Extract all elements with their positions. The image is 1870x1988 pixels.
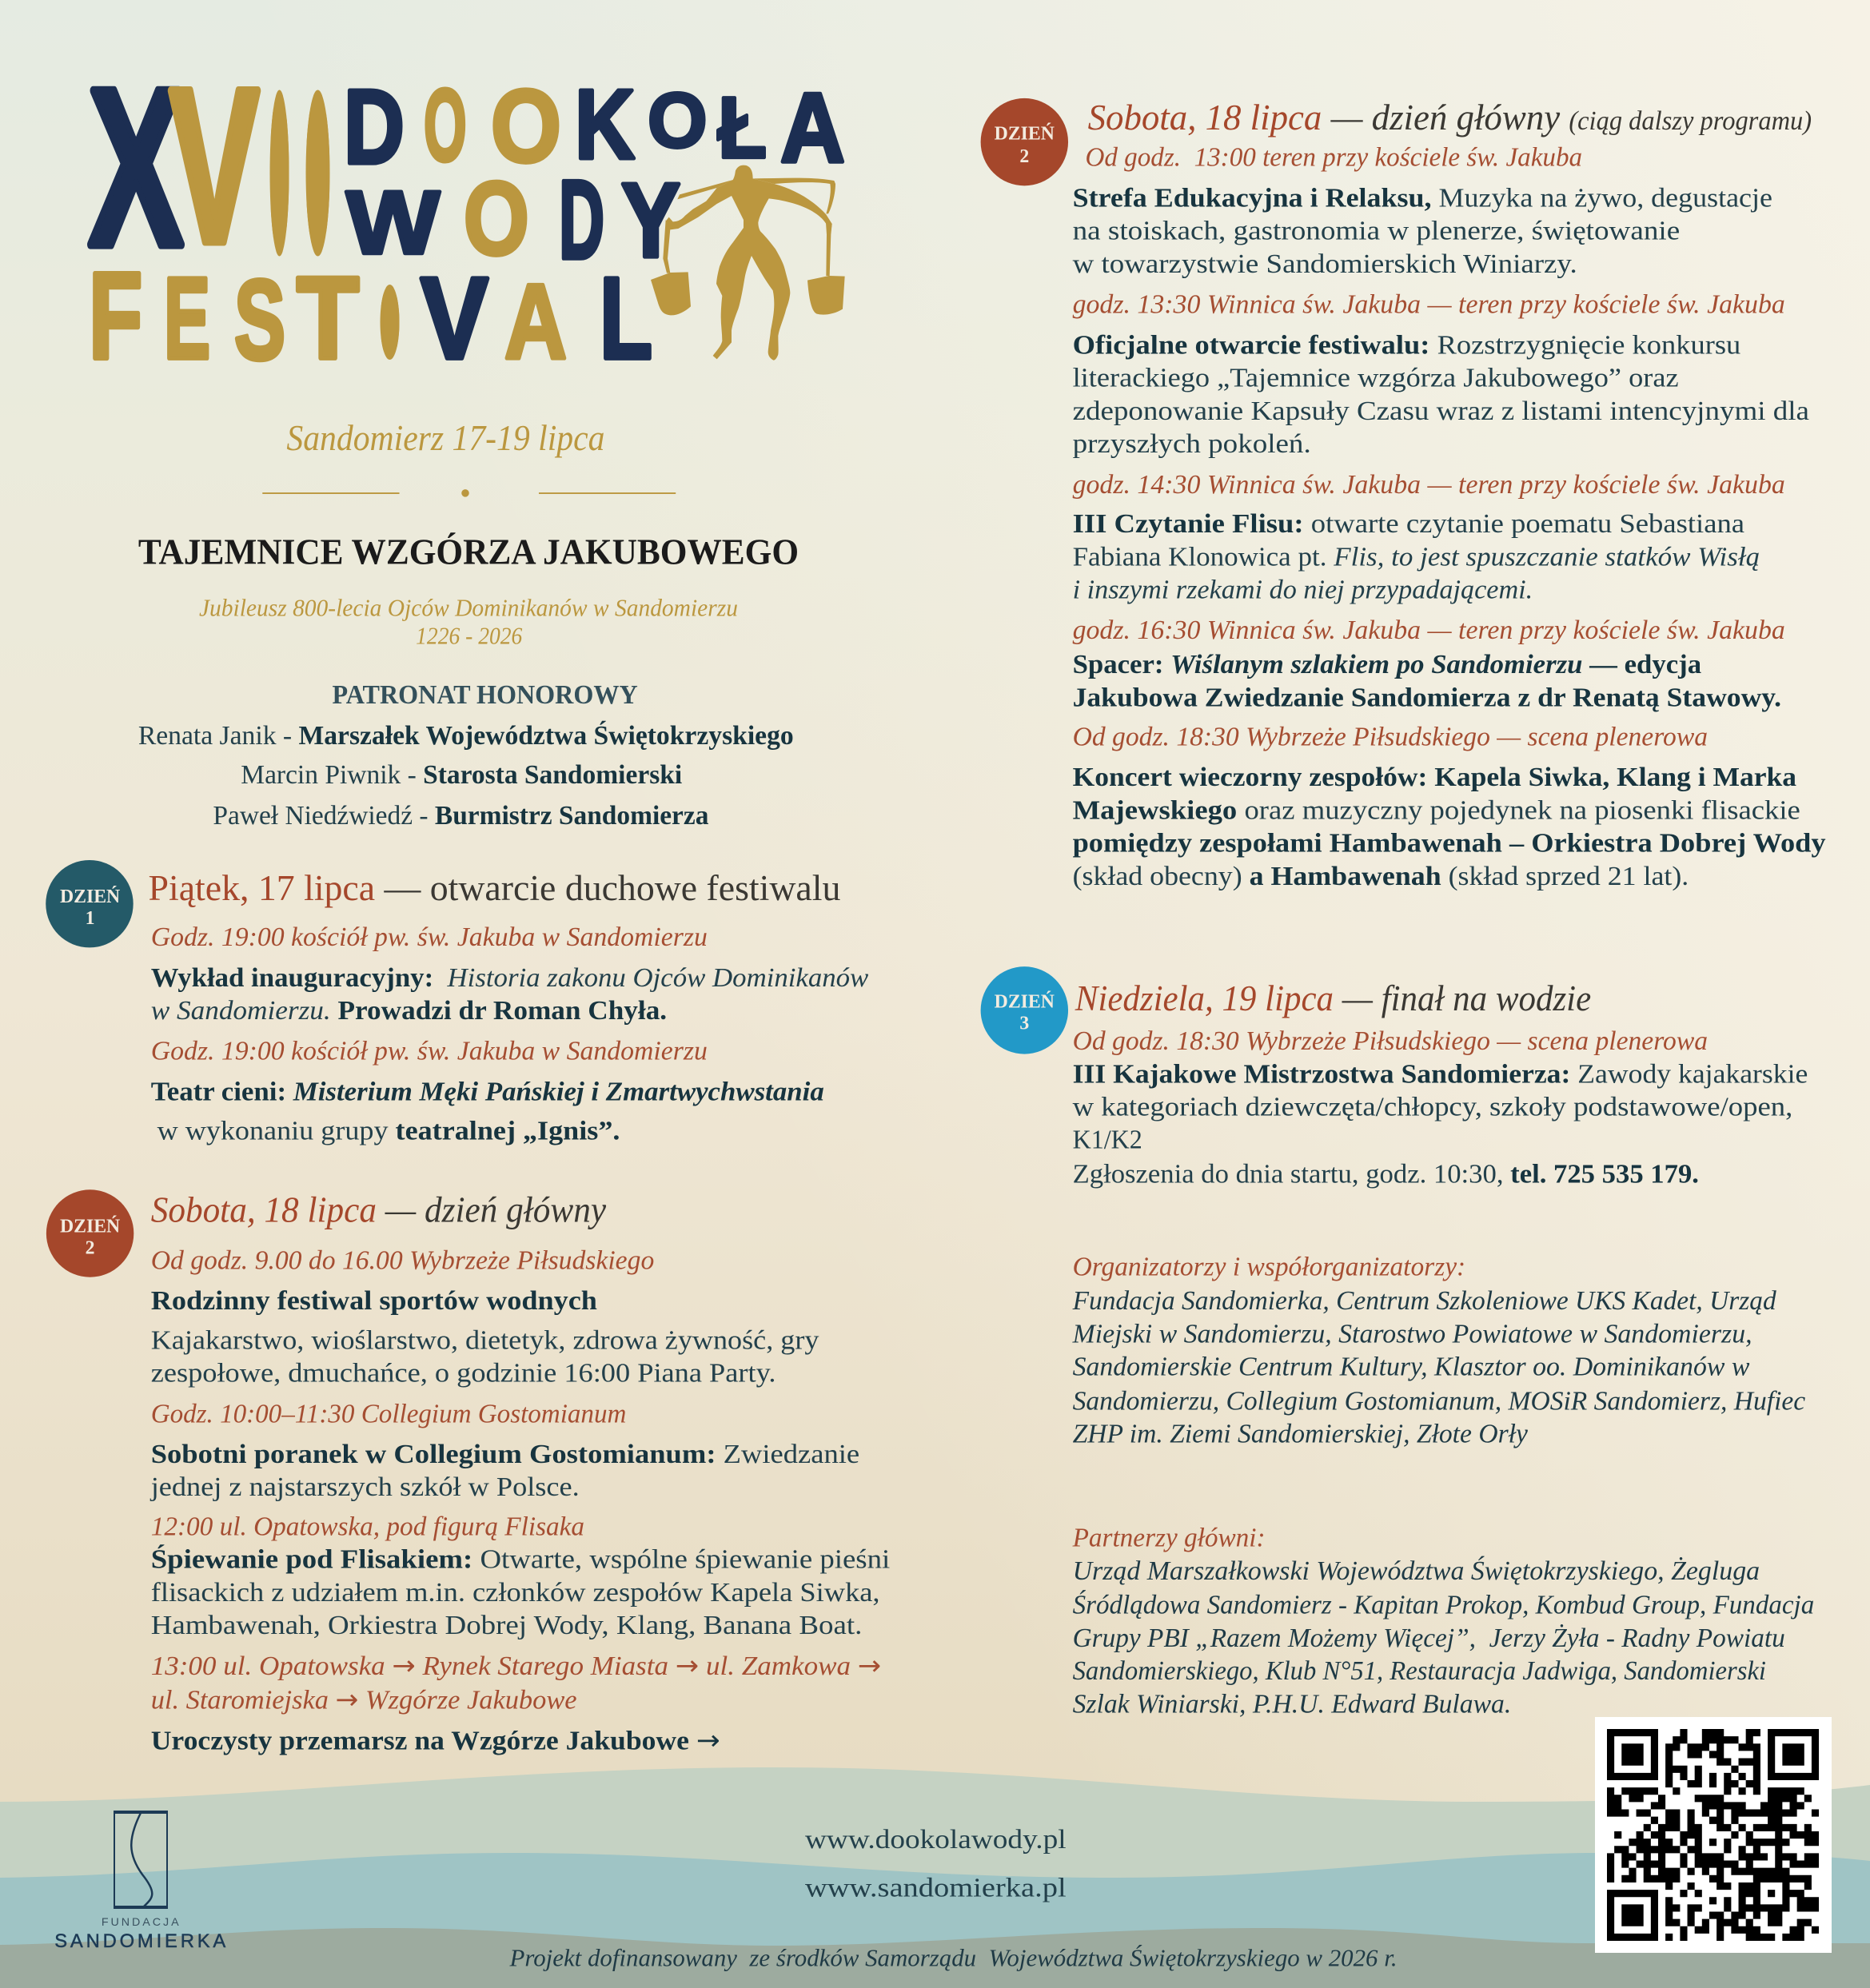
honorary patronage: Paweł Niedźwiedź - Burmistrz Sandomierza [213,801,708,831]
icon: water carrier figure [651,165,845,361]
day 2 afternoon events: pomiędzy zespołami Hambawenah – Orkiestra Dobrej Wody [1073,829,1826,859]
organizers list: Fundacja Sandomierka, Centrum Szkoleniowe UKS Kadet, Urząd [1072,1286,1776,1316]
funding note: Projekt dofinansowany ze środków Samorządu Województwa Świętokrzyskiego w 2026 r. [508,1944,1398,1972]
website links: www.sandomierka.pl [805,1873,1067,1902]
day 2 afternoon events: literackiego „Tajemnice wzgórza Jakubowego” oraz [1073,364,1679,393]
badge: day 3: 3 [1019,1014,1029,1034]
day 2 morning events: Kajakarstwo, wioślarstwo, dietetyk, zdrowa żywność, gry [151,1325,819,1355]
day 2 morning events: Śpiewanie pod Flisakiem: Otwarte, wspólne śpiewanie pieśni [151,1544,890,1575]
day 3 event: Od godz. 18:30 Wybrzeże Piłsudskiego — scena plenerowa [1073,1026,1708,1056]
logo numeral XVII: I [296,39,341,308]
day 2 continued heading: Sobota, 18 lipca — dzień główny (ciąg dalszy programu) [1088,97,1812,137]
organizers list: Sandomierzu, Collegium Gostomianum, MOSiR Sandomierz, Hufiec [1073,1386,1805,1416]
day 1 events: Godz. 19:00 kościół pw. św. Jakuba w Sandomierzu [151,1037,708,1066]
organizers list: Miejski w Sandomierzu, Starostwo Powiatowe w Sandomierzu, [1072,1319,1752,1349]
day 1 events: Teatr cieni: Misterium Męki Pańskiej i Zmartwychwstania [151,1077,824,1106]
logo numeral XVII: I [262,39,297,307]
honorary patronage: Marcin Piwnik - Starosta Sandomierski [241,760,682,790]
partners list: Grupy PBI „Razem Możemy Więcej”, Jerzy Żyła - Radny Powiatu [1073,1623,1785,1653]
partners list: Szlak Winiarski, P.H.U. Edward Bulawa. [1073,1689,1511,1719]
day 2 morning events: Od godz. 9.00 do 16.00 Wybrzeże Piłsudskiego [151,1245,654,1275]
logo word WODY: D [559,157,604,283]
day 2 afternoon events: Jakubowa Zwiedzanie Sandomierza z dr Renatą Stawowy. [1073,683,1781,712]
badge: day 3 [981,966,1068,1054]
day 2 afternoon events: Strefa Edukacyjna i Relaksu, Muzyka na żywo, degustacje [1073,183,1772,213]
logo word FESTIVAL: T [297,253,359,384]
logo word FESTIVAL: E [164,254,210,384]
logo word WODY: W [346,173,441,273]
badge: day 2 continued [981,98,1068,185]
logo word FESTIVAL: A [504,261,567,381]
logo word FESTIVAL: S [234,256,285,383]
day 2 morning events [150,1245,890,1756]
panel: day 1 [46,860,869,1146]
honorary patronage: Renata Janik - Marszałek Województwa Świętokrzyskiego [138,720,794,751]
festival logo [87,86,845,363]
day 3 event: K1/K2 [1073,1125,1142,1155]
organizers heading: Organizatorzy i współorganizatorzy: [1073,1252,1465,1281]
logo word DOOKOŁA [344,68,845,186]
organizers list [1072,1286,1805,1449]
partners list: Śródlądowa Sandomierz - Kapitan Prokop, Kombud Group, Fundacja [1073,1590,1814,1620]
day 2 morning events: ul. Staromiejska → Wzgórze Jakubowe [151,1684,577,1716]
day 2 afternoon events: i inszymi rzekami do niej przypadającemi. [1073,575,1533,604]
foundation name: SANDOMIERKA [54,1930,225,1952]
badge: day 2: 2 [86,1237,95,1258]
logo word FESTIVAL: F [89,248,142,384]
logo word DOOKOŁA: D [344,69,405,186]
logo word WODY: O [464,161,529,277]
day 2 afternoon events: przyszłych pokoleń. [1073,429,1311,459]
left header block [138,417,799,831]
day 2 afternoon events: w towarzystwie Sandomierskich Winiarzy. [1073,249,1577,279]
partners list [1073,1556,1814,1719]
footer waves [0,1767,1870,1988]
day 1 events: Wykład inauguracyjny: Historia zakonu Ojców Dominikanów [151,963,869,993]
jubilee subtitle: Jubileusz 800-lecia Ojców Dominikanów w Sandomierzu [199,595,738,622]
panel: partners [1072,1524,1814,1719]
badge: day 2 continued: DZIEŃ [995,123,1055,144]
logo word DOOKOŁA: O [424,68,467,182]
day 2 afternoon events: godz. 14:30 Winnica św. Jakuba — teren przy kościele św. Jakuba [1073,470,1785,500]
logo word DOOKOŁA: O [491,68,561,184]
day 2 afternoon events: godz. 13:30 Winnica św. Jakuba — teren przy kościele św. Jakuba [1073,290,1785,320]
day 1 events [151,922,869,1146]
day 2 afternoon events [1073,143,1826,891]
partners list: Sandomierskiego, Klub N°51, Restauracja Jadwiga, Sandomierski [1073,1656,1766,1686]
icon: Sandomierka emblem [114,1811,167,1908]
day 2 afternoon events: Fabiana Klonowica pt. Flis, to jest spuszczanie statków Wisłą [1073,542,1760,572]
jubilee subtitle [199,595,738,650]
day 2 morning events: zespołowe, dmuchańce, o godzinie 16:00 Piana Party. [151,1359,776,1388]
day 2 afternoon events: Od godz. 13:00 teren przy kościele św. Jakuba [1085,143,1582,173]
day 2 afternoon events: na stoiskach, gastronomia w plenerze, świętowanie [1073,217,1680,246]
day 1 events: Godz. 19:00 kościół pw. św. Jakuba w Sandomierzu [151,922,708,952]
day 2 afternoon events: Koncert wieczorny zespołów: Kapela Siwka, Klang i Marka [1073,763,1796,792]
partners heading: Partnerzy główni: [1072,1524,1266,1553]
badge: day 1: DZIEŃ [60,886,120,907]
logo word DOOKOŁA: A [780,73,845,182]
foundation logo [54,1811,225,1952]
day 2 morning events: Godz. 10:00–11:30 Collegium Gostomianum [151,1399,626,1428]
day 2 morning events: 13:00 ul. Opatowska → Rynek Starego Miasta → ul. Zamkowa → [151,1650,881,1682]
day 2 morning events: Uroczysty przemarsz na Wzgórze Jakubowe → [151,1724,720,1756]
logo word WODY [346,157,680,283]
logo word FESTIVAL: L [600,254,652,384]
badge: day 2 [46,1189,134,1277]
day 3 event: III Kajakowe Mistrzostwa Sandomierza: Zawody kajakarskie [1073,1059,1808,1089]
website links [805,1825,1067,1902]
day 3 event: Zgłoszenia do dnia startu, godz. 10:30, tel. 725 535 179. [1073,1160,1699,1189]
logo word FESTIVAL [93,271,652,363]
date and place: Sandomierz 17-19 lipca [286,417,604,458]
logo word DOOKOŁA: Ł [718,79,767,177]
day 2 afternoon events: Majewskiego oraz muzyczny pojedynek na piosenki flisackie [1073,795,1800,825]
foundation name [54,1916,225,1952]
day 1 events: w wykonaniu grupy teatralnej „Ignis”. [157,1117,620,1146]
partners list: Urząd Marszałkowski Województwa Świętokrzyskiego, Żegluga [1073,1556,1760,1586]
day 1 heading: Piątek, 17 lipca — otwarcie duchowe festiwalu [149,867,840,908]
honorary patronage: PATRONAT HONOROWY [332,680,638,710]
day 3 event: w kategoriach dziewczęta/chłopcy, szkoły podstawowe/open, [1073,1093,1792,1122]
jubilee subtitle: 1226 - 2026 [416,623,522,650]
main title: TAJEMNICE WZGÓRZA JAKUBOWEGO [138,532,799,572]
website links: www.dookolawody.pl [805,1825,1067,1855]
panel: day 2 continued [981,97,1826,891]
day 2 morning events: Rodzinny festiwal sportów wodnych [151,1286,597,1316]
badge: day 2 continued: 2 [1019,146,1029,167]
badge: day 1: 1 [86,908,95,929]
organizers list: ZHP im. Ziemi Sandomierskiej, Złote Orły [1073,1420,1528,1449]
badge: day 1 [46,860,134,947]
day 3 heading: Niedziela, 19 lipca — finał na wodzie [1075,978,1591,1018]
logo word WODY: Y [621,161,680,279]
panel: day 2 left [46,1189,890,1756]
ornament divider [262,489,676,497]
day 2 afternoon events: zdeponowanie Kapsuły Czasu wraz z listami intencyjnymi dla [1073,396,1809,426]
logo numeral XVII: X [89,42,183,293]
logo word DOOKOŁA: O [648,78,708,164]
day 2 afternoon events: Spacer: Wiślanym szlakiem po Sandomierzu — edycja [1073,650,1701,679]
badge: day 2: DZIEŃ [60,1216,120,1237]
panel: day 3 [981,966,1808,1189]
day 2 afternoon events: Od godz. 18:30 Wybrzeże Piłsudskiego — scena plenerowa [1073,722,1708,751]
logo word DOOKOŁA: K [575,70,635,180]
logo numeral XVII [87,86,329,256]
day 2 afternoon events: godz. 16:30 Winnica św. Jakuba — teren przy kościele św. Jakuba [1073,616,1785,645]
day 2 morning events: jednej z najstarszych szkół w Polsce. [150,1472,580,1502]
day 2 morning events: Sobotni poranek w Collegium Gostomianum: Zwiedzanie [151,1440,859,1469]
day 2 afternoon events: Oficjalne otwarcie festiwalu: Rozstrzygnięcie konkursu [1073,330,1740,360]
day 3 event [1073,1026,1808,1189]
badge: day 3: DZIEŃ [995,992,1055,1013]
panel: organizers [1072,1252,1805,1449]
day 2 morning events: flisackich z udziałem m.in. członków zespołów Kapela Siwka, [151,1578,880,1608]
day 2 afternoon events: III Czytanie Flisu: otwarte czytanie poematu Sebastiana [1073,509,1744,539]
logo word FESTIVAL: I [373,263,408,382]
day 1 events: w Sandomierzu. Prowadzi dr Roman Chyła. [151,996,667,1026]
organizers list: Sandomierskie Centrum Kultury, Klasztor oo. Dominikanów w [1073,1353,1749,1382]
day 2 morning events: Hambawenah, Orkiestra Dobrej Wody, Klang, Banana Boat. [151,1611,862,1640]
foundation name: FUNDACJA [102,1916,179,1929]
logo numeral XVII: V [169,44,259,289]
day 2 afternoon events: (skład obecny) a Hambawenah (skład sprzed 21 lat). [1073,862,1689,891]
day 2 heading: Sobota, 18 lipca — dzień główny [151,1189,607,1230]
honorary patronage [138,680,794,831]
QR code [1595,1717,1832,1953]
day 2 morning events: 12:00 ul. Opatowska, pod figurą Flisaka [151,1512,584,1541]
logo word FESTIVAL: V [421,253,488,383]
